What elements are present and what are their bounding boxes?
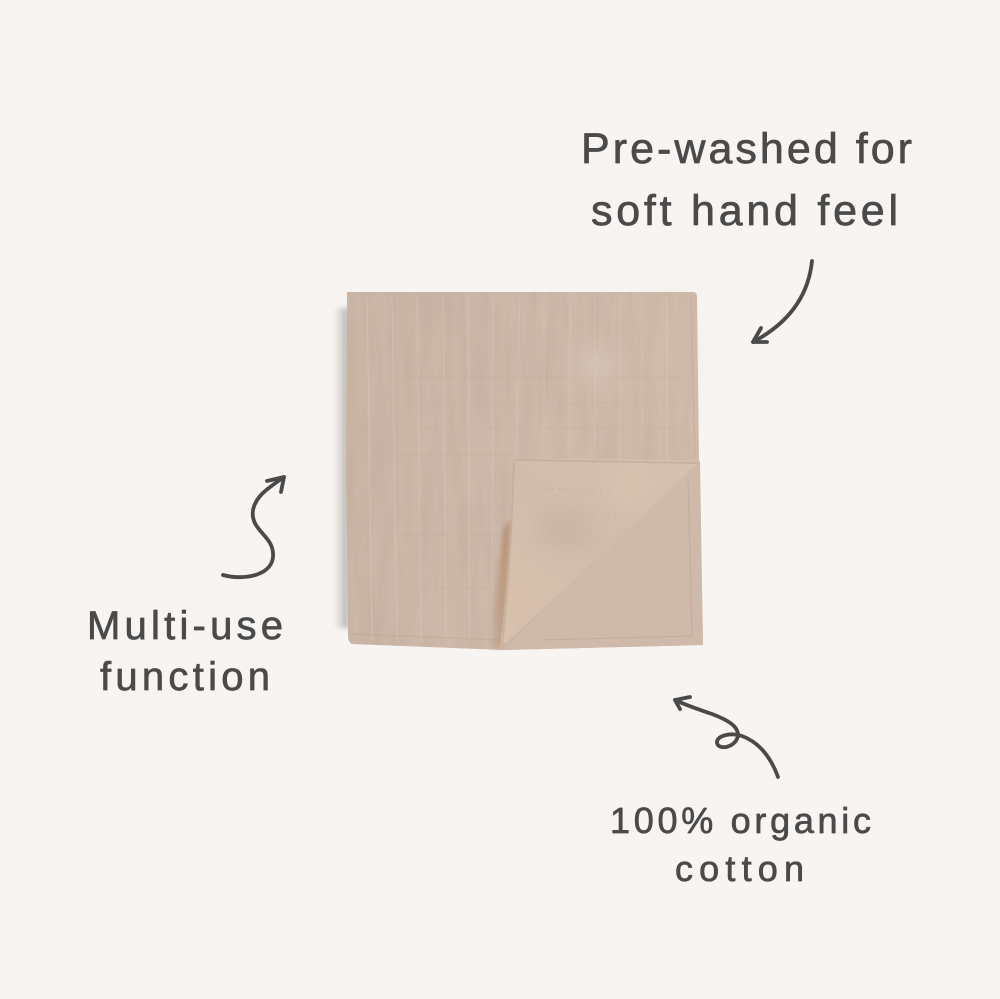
vertical stitch lines	[367, 297, 667, 640]
callout: multi-use text	[87, 604, 283, 699]
cloth shadow	[334, 308, 348, 628]
callout: organic cotton text: 100% organic	[610, 800, 871, 841]
shadow beneath fold	[486, 520, 510, 648]
callout: multi-use text: Multi-use	[87, 604, 283, 648]
arrow: pre-washed to cloth	[753, 261, 812, 342]
lower right layer	[503, 461, 703, 650]
callout: pre-washed text	[581, 125, 912, 235]
callout: organic cotton text	[610, 800, 871, 889]
muslin cloth photo	[334, 292, 704, 651]
folded corner flap	[500, 459, 700, 648]
arrow: multi-use to cloth	[223, 477, 284, 577]
callout: pre-washed text: Pre-washed for	[581, 125, 912, 173]
horizontal stitch lines	[400, 377, 680, 588]
arrow: organic cotton to cloth	[675, 697, 778, 777]
callout: pre-washed text: soft hand feel	[591, 187, 898, 235]
flap shading	[539, 476, 646, 548]
flap hem	[502, 460, 698, 646]
callout: organic cotton text: cotton	[675, 848, 804, 889]
lower right stitching	[540, 478, 692, 640]
flap stitches	[530, 488, 620, 540]
light patch	[571, 300, 682, 420]
callout: multi-use text: function	[100, 655, 270, 699]
bottom and right hem	[352, 296, 695, 640]
fabric texture	[346, 292, 704, 651]
cloth body	[346, 292, 703, 650]
